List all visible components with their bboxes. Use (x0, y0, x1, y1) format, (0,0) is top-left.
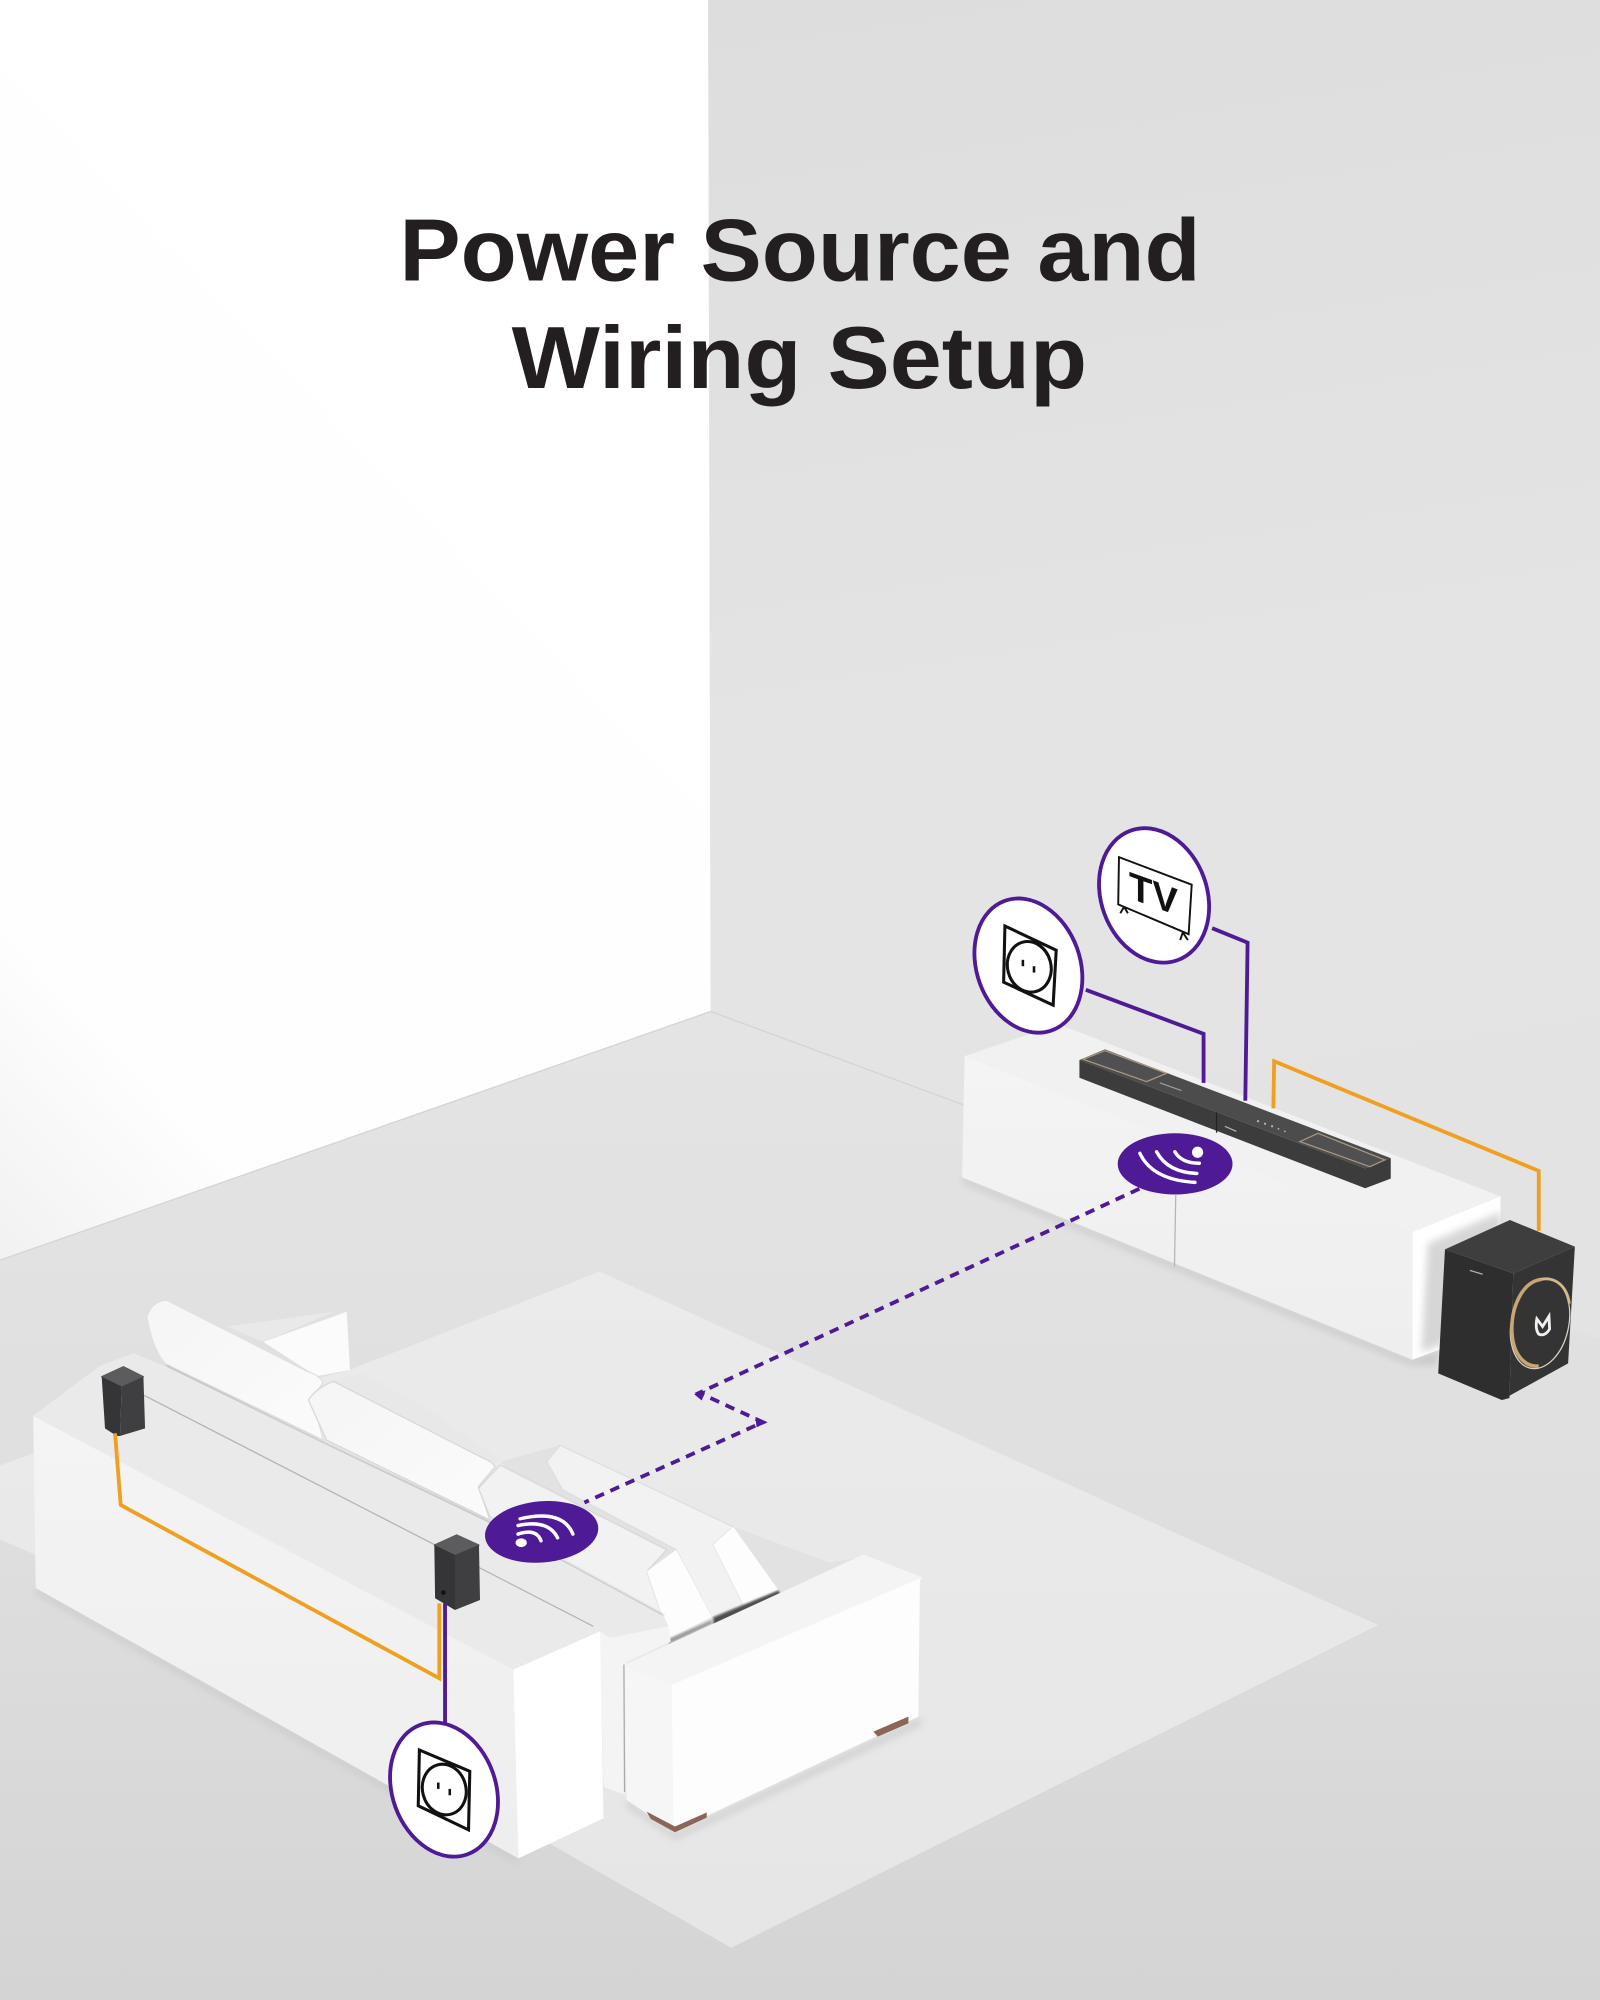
soundbar buttons (1257, 1120, 1286, 1132)
floor (0, 1011, 1600, 2000)
console floor shadow (962, 1177, 1442, 1365)
sofa foot back (873, 1717, 908, 1737)
orange wire: rear speakers (115, 1433, 439, 1678)
sofa arm top (625, 1557, 920, 1685)
cushion three end (713, 1527, 778, 1605)
cushion three body (547, 1445, 743, 1617)
sofa arm side (672, 1578, 920, 1832)
soundbar (1079, 1049, 1391, 1188)
title: Wiring Setup (512, 308, 1087, 407)
console front face (962, 1056, 1412, 1360)
small pillow top (478, 1465, 667, 1626)
subwoofer gold ring (1502, 1272, 1578, 1374)
back pillow (227, 1312, 350, 1376)
purple wire: TV to soundbar (1212, 928, 1248, 1101)
sofa (147, 1300, 921, 1839)
sofa foot front (647, 1812, 707, 1832)
icon: TV callout: TV (1129, 864, 1179, 925)
left wall (0, 0, 711, 1260)
sofa arm inner groove (623, 1665, 626, 1792)
cushion one (147, 1300, 323, 1440)
purple wire: socket to soundbar (1086, 990, 1204, 1083)
icon: socket callout (956, 883, 1101, 1048)
console side face (1412, 1196, 1500, 1360)
cabinet end face (513, 1631, 603, 1858)
cabinet behind sofa (33, 1353, 669, 1864)
cushion contact shadow (166, 1366, 663, 1616)
cabinet top face (33, 1353, 669, 1670)
small pillow end (647, 1550, 712, 1638)
subwoofer logo (1536, 1316, 1550, 1335)
subwoofer shadow on console (1421, 1212, 1500, 1352)
cabinet floor shadow (36, 1588, 518, 1864)
console top face (965, 1024, 1500, 1232)
title (399, 201, 1201, 407)
rear speaker right (434, 1535, 480, 1610)
sofa arm front (625, 1667, 673, 1832)
wireless dashed link (584, 1189, 1139, 1503)
icon: wireless badge at sofa (482, 1496, 601, 1567)
TV console (962, 1024, 1500, 1365)
sofa mid section (600, 1617, 671, 1795)
cushion two back layer (333, 1373, 500, 1467)
seat dark gap (713, 1591, 781, 1625)
sofa floor shadow (626, 1718, 921, 1839)
icon: wireless badge at soundbar (1118, 1133, 1233, 1195)
right wall (708, 0, 1600, 1352)
subwoofer (1438, 1220, 1578, 1400)
rear speaker left (102, 1367, 145, 1436)
wall and floor joint (0, 1011, 970, 1260)
icon: rear socket callout (372, 1707, 516, 1872)
purple wire: rear socket to speaker (444, 1603, 447, 1727)
orange wire: soundbar to subwoofer (1273, 1061, 1539, 1231)
icon: TV callout (1081, 813, 1227, 978)
title: Power Source and (399, 201, 1201, 300)
sofa seat interior (500, 1445, 863, 1601)
cushion two (308, 1381, 495, 1520)
cabinet long face (33, 1416, 518, 1858)
rug (0, 1272, 1378, 1948)
